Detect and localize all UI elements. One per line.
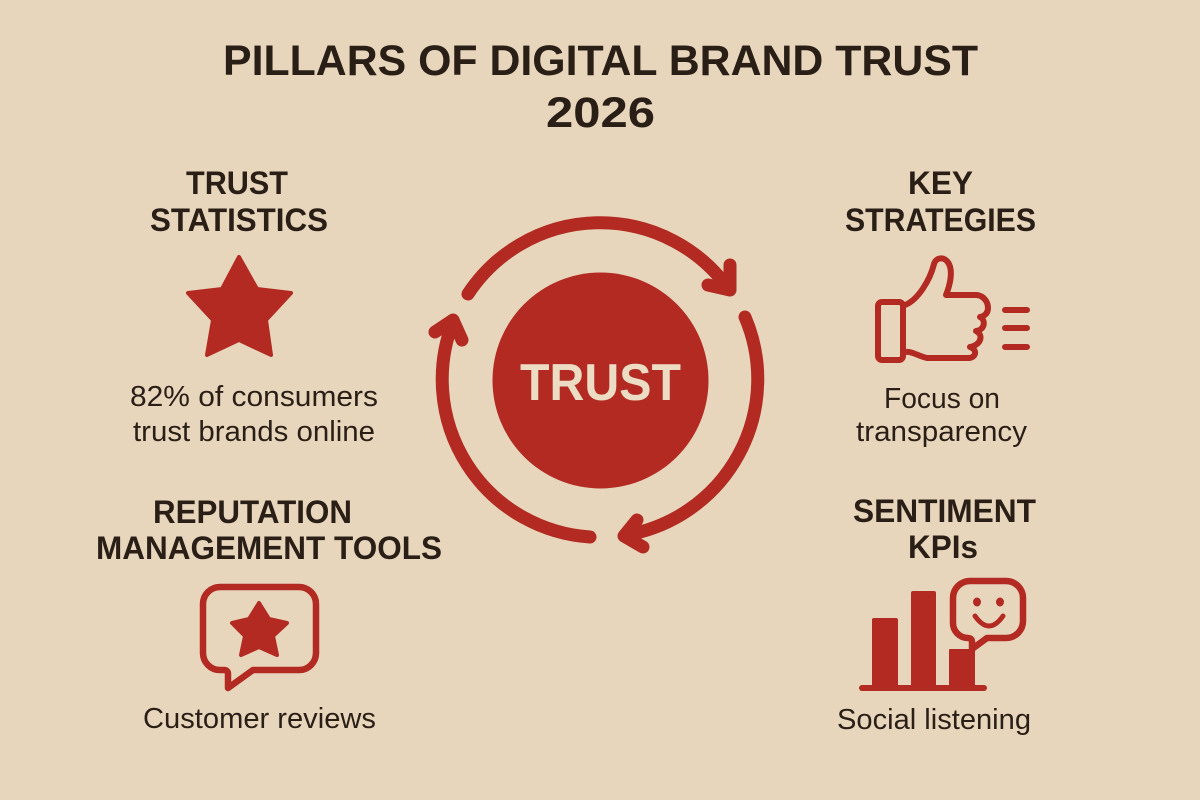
heading: sentiment KPIs: KPIs bbox=[908, 529, 978, 565]
panel: key strategies bbox=[845, 165, 1036, 448]
text: reviews: Customer reviews bbox=[143, 703, 376, 735]
heading: trust statistics bbox=[150, 165, 328, 238]
center circle with TRUST label bbox=[492, 272, 708, 488]
title: 2026 bbox=[546, 90, 655, 137]
heading: key strategies: STRATEGIES bbox=[845, 202, 1036, 238]
panel: sentiment KPIs bbox=[837, 493, 1036, 736]
text: statistic: trust brands online bbox=[133, 416, 375, 448]
icon: bar chart with smiley bubble bbox=[862, 581, 1023, 688]
arrow: left arc bbox=[435, 320, 590, 537]
heading: key strategies: KEY bbox=[908, 165, 973, 201]
heading: trust statistics: TRUST bbox=[186, 165, 288, 201]
icon: thumbs up bbox=[878, 258, 1027, 360]
title bbox=[223, 38, 978, 137]
heading: sentiment KPIs bbox=[853, 493, 1036, 565]
panel: reputation management tools bbox=[96, 494, 442, 735]
text: strategy: transparency bbox=[856, 416, 1027, 448]
heading: trust statistics: STATISTICS bbox=[150, 202, 328, 238]
icon: star bbox=[188, 257, 291, 355]
heading: reputation management tools bbox=[96, 494, 442, 566]
center circle with TRUST label: TRUST bbox=[520, 354, 681, 412]
arrow: right arc bbox=[624, 317, 758, 547]
heading: sentiment KPIs: SENTIMENT bbox=[853, 493, 1036, 529]
text: strategy bbox=[856, 383, 1027, 448]
icon: review bubble bbox=[203, 587, 316, 688]
panel: trust statistics bbox=[130, 165, 378, 448]
text: statistic: 82% of consumers bbox=[130, 381, 378, 413]
text: social listening: Social listening bbox=[837, 704, 1031, 736]
heading: reputation management tools: MANAGEMENT TOOLS bbox=[96, 530, 442, 566]
panel: trust cycle bbox=[435, 223, 758, 547]
text: strategy: Focus on bbox=[884, 383, 1000, 415]
heading: reputation management tools: REPUTATION bbox=[153, 494, 352, 530]
text: statistic bbox=[130, 381, 378, 448]
arrow: top arc bbox=[468, 223, 730, 294]
title: PILLARS OF DIGITAL BRAND TRUST bbox=[223, 38, 978, 85]
heading: key strategies bbox=[845, 165, 1036, 238]
